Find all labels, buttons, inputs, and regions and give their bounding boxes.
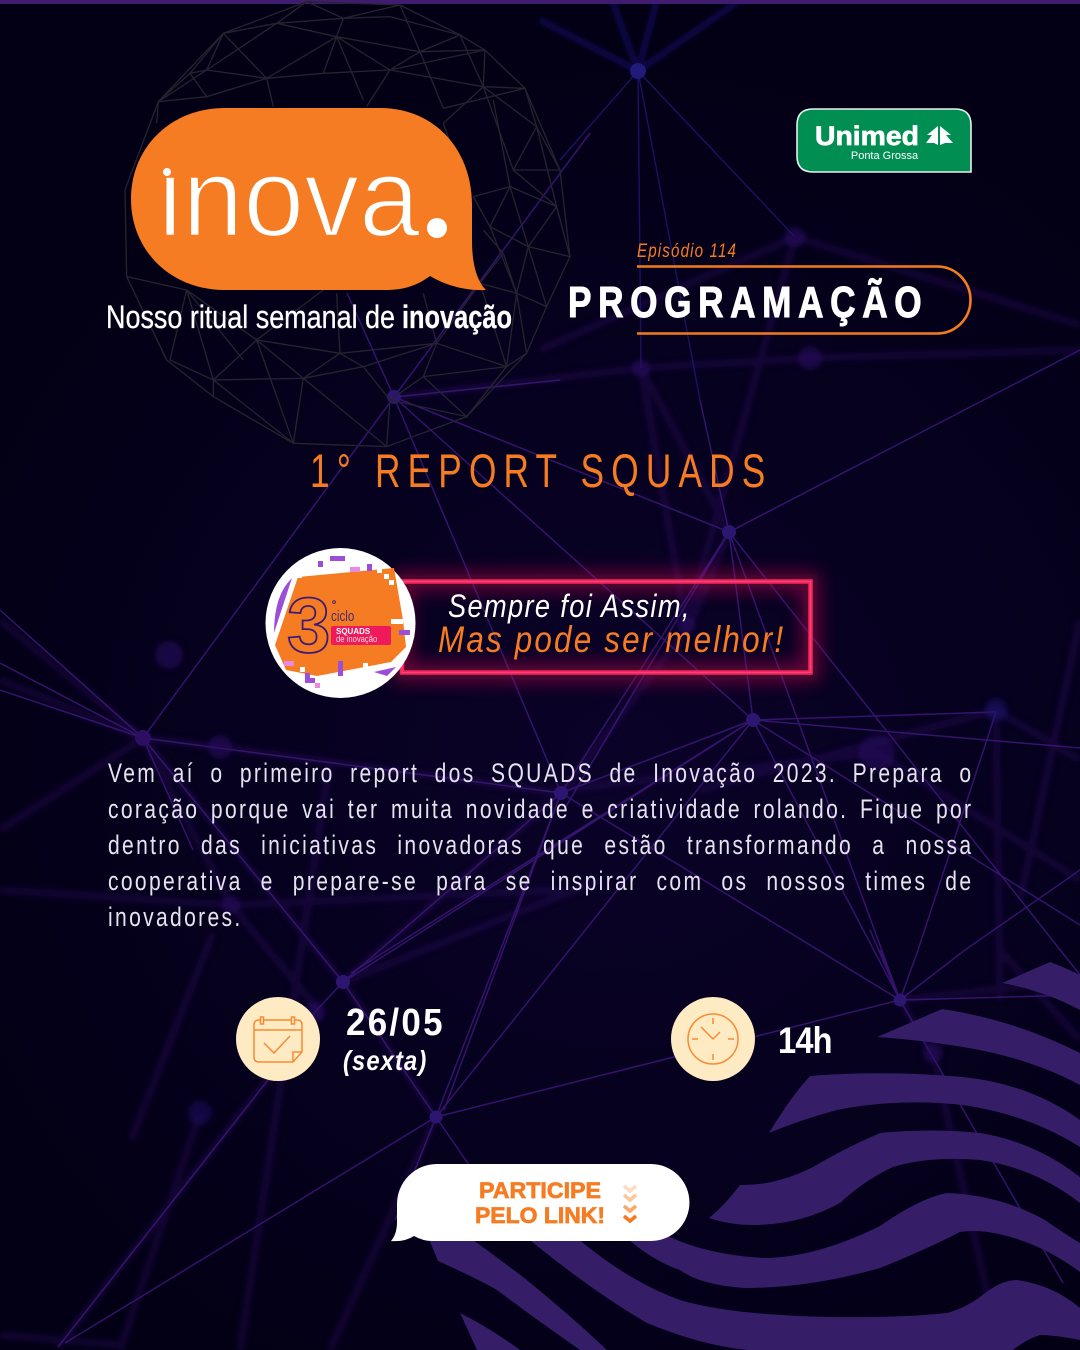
- squads badge: SQUADS: [336, 627, 371, 636]
- body text: dentro das iniciativas inovadoras que estão transformando a nossa: [108, 830, 973, 860]
- inova logo with tagline: inovação: [402, 299, 512, 335]
- inova logo with tagline: Nosso ritual semanal de: [106, 299, 395, 335]
- body text: cooperativa e prepare-se para se inspirar com os nossos times de: [108, 866, 973, 896]
- body text: coração porque vai ter muita novidade e criatividade rolando. Fique por: [108, 794, 973, 824]
- episode and programme heading: PROGRAMAÇÃO: [568, 276, 922, 327]
- squads badge: º: [332, 599, 336, 611]
- inova logo with tagline: inova: [158, 135, 421, 260]
- inova logo with tagline: .: [432, 201, 443, 245]
- squads badge: de inovação: [336, 633, 378, 644]
- body text: inovadores.: [108, 902, 243, 932]
- squads badge: 3: [287, 581, 330, 669]
- squads badge: ciclo: [331, 608, 354, 624]
- episode and programme heading: Episódio 114: [637, 239, 736, 261]
- neon banner with slogan: Mas pode ser melhor!: [438, 620, 784, 661]
- date block with calendar icon: (sexta): [343, 1044, 426, 1076]
- body text: Vem aí o primeiro report dos SQUADS de Inovação 2023. Prepara o: [108, 758, 973, 788]
- Unimed badge: Ponta Grossa: [851, 150, 919, 162]
- call to action button: PARTICIPE: [479, 1178, 601, 1203]
- time block with clock icon: 14h: [778, 1020, 833, 1061]
- Unimed badge: Unimed: [815, 121, 919, 151]
- call to action button: PELO LINK!: [475, 1203, 605, 1228]
- date block with calendar icon: 26/05: [346, 1001, 443, 1043]
- heading: 1° report squads: 1° REPORT SQUADS: [310, 444, 765, 497]
- neon banner with slogan: Sempre foi Assim,: [448, 589, 689, 625]
- body text: [108, 758, 973, 932]
